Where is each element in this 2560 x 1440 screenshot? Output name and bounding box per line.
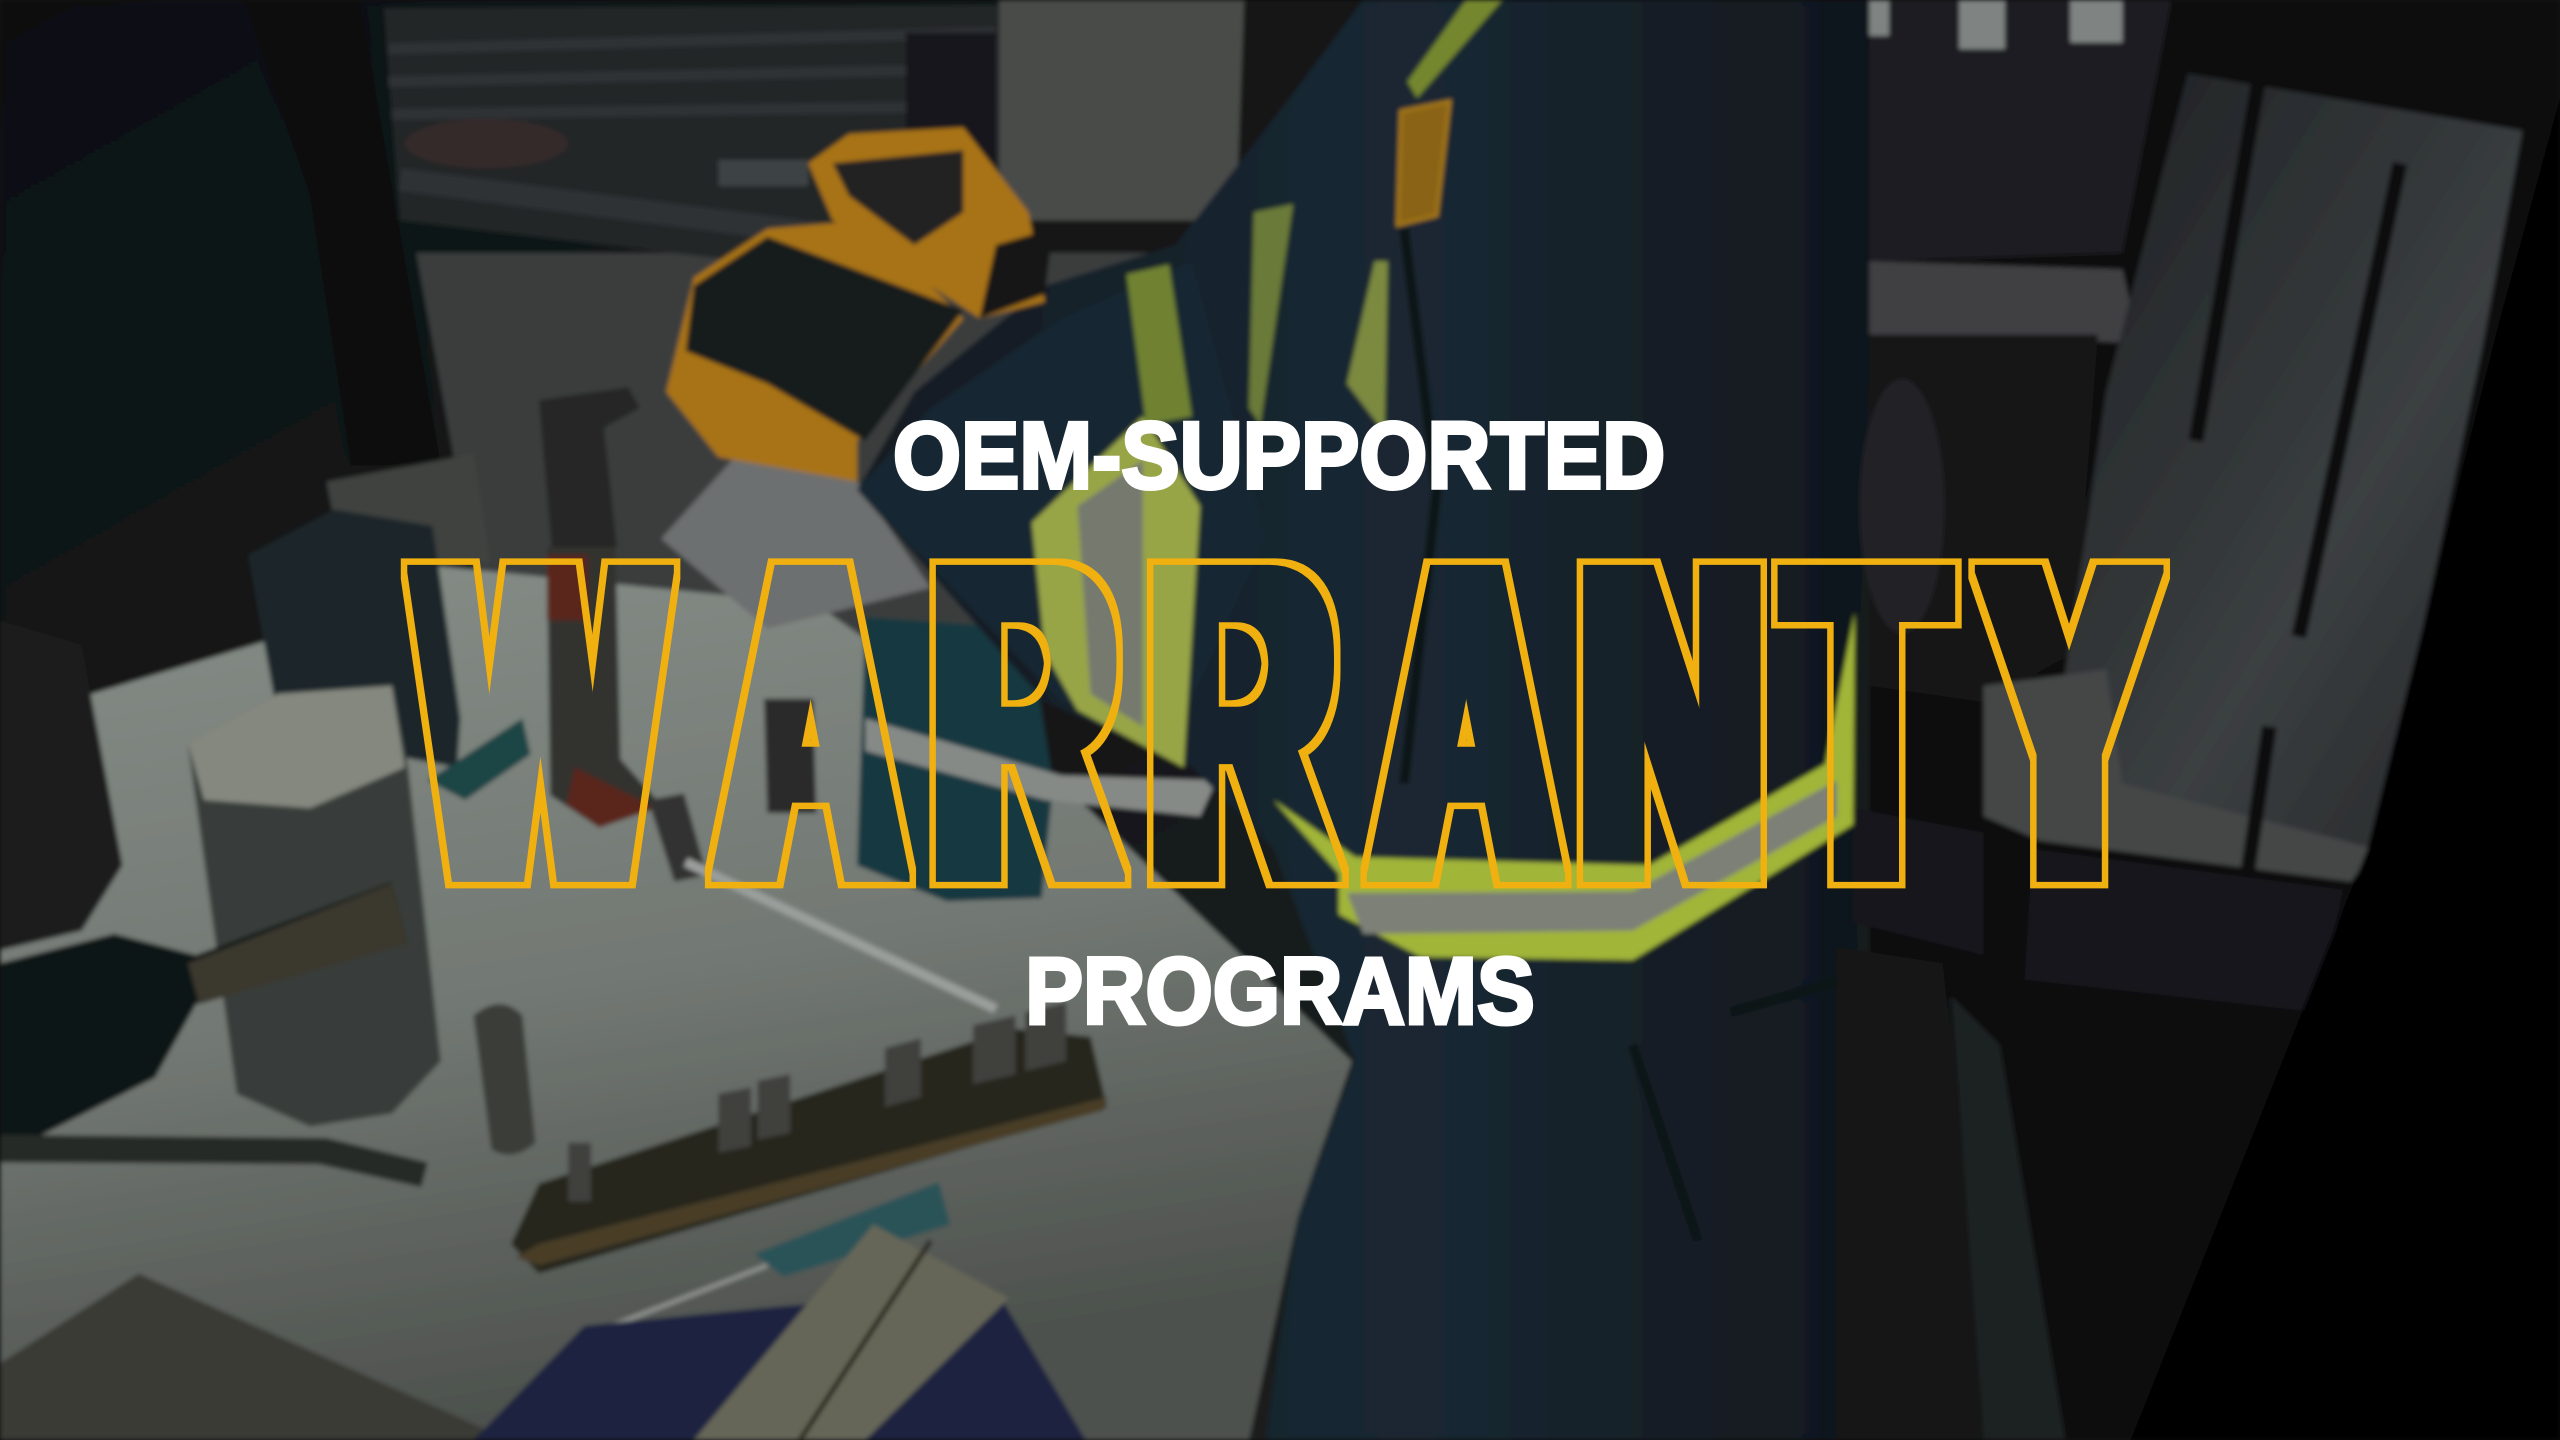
floor [1837, 947, 1992, 1440]
dark rods [2196, 65, 2400, 1143]
vise [473, 1224, 1086, 1440]
floor grate [1853, 808, 2343, 1012]
reflective steel cabinet [2049, 73, 2522, 849]
inverter box [384, 5, 999, 281]
glove upper [808, 127, 1053, 318]
metal duct top right of inverter [999, 0, 1244, 220]
upper cuff [1127, 264, 1192, 424]
blue glass filter [857, 617, 1053, 901]
heading: PROGRAMS: PROGRAMS [1025, 939, 1535, 1045]
placket and fold shadows [1404, 229, 1845, 1241]
loose socket [473, 1004, 536, 1155]
bracket [327, 454, 490, 563]
pry bar [0, 1135, 428, 1187]
logo badge [1398, 101, 1450, 225]
spanner [865, 718, 1216, 816]
red ratchet [539, 387, 661, 828]
screwdriver handle [428, 718, 531, 800]
screwdriver [754, 1182, 950, 1277]
chest reflective stripes [1249, 204, 1293, 424]
black plastic bag left [0, 620, 122, 950]
glove lower [666, 220, 963, 482]
torque wrench [686, 862, 996, 1009]
hem reflective band [1273, 612, 1855, 960]
tool sockets [764, 699, 816, 813]
sleeve [857, 261, 1265, 735]
steel plate lower left [0, 1273, 509, 1440]
title: WARRANTY outlined: WARRANTY [421, 471, 2153, 975]
metal wall behind bench [416, 253, 1241, 653]
white filter with John Deere label [188, 686, 441, 1127]
worker coverall [857, 0, 1869, 1440]
heading: OEM-SUPPORTED: OEM-SUPPORTED [893, 403, 1665, 509]
socket rail [511, 1002, 1107, 1273]
right black column [2131, 98, 2560, 1440]
right machinery upper [1860, 0, 2560, 1440]
impact tool lower left [0, 882, 408, 1156]
sleeve cuff reflective [1032, 416, 1200, 767]
cables on left wall [245, 0, 441, 465]
dark filter [248, 509, 460, 767]
shrink wrap and white part [661, 457, 931, 629]
workbench [0, 563, 1352, 1440]
